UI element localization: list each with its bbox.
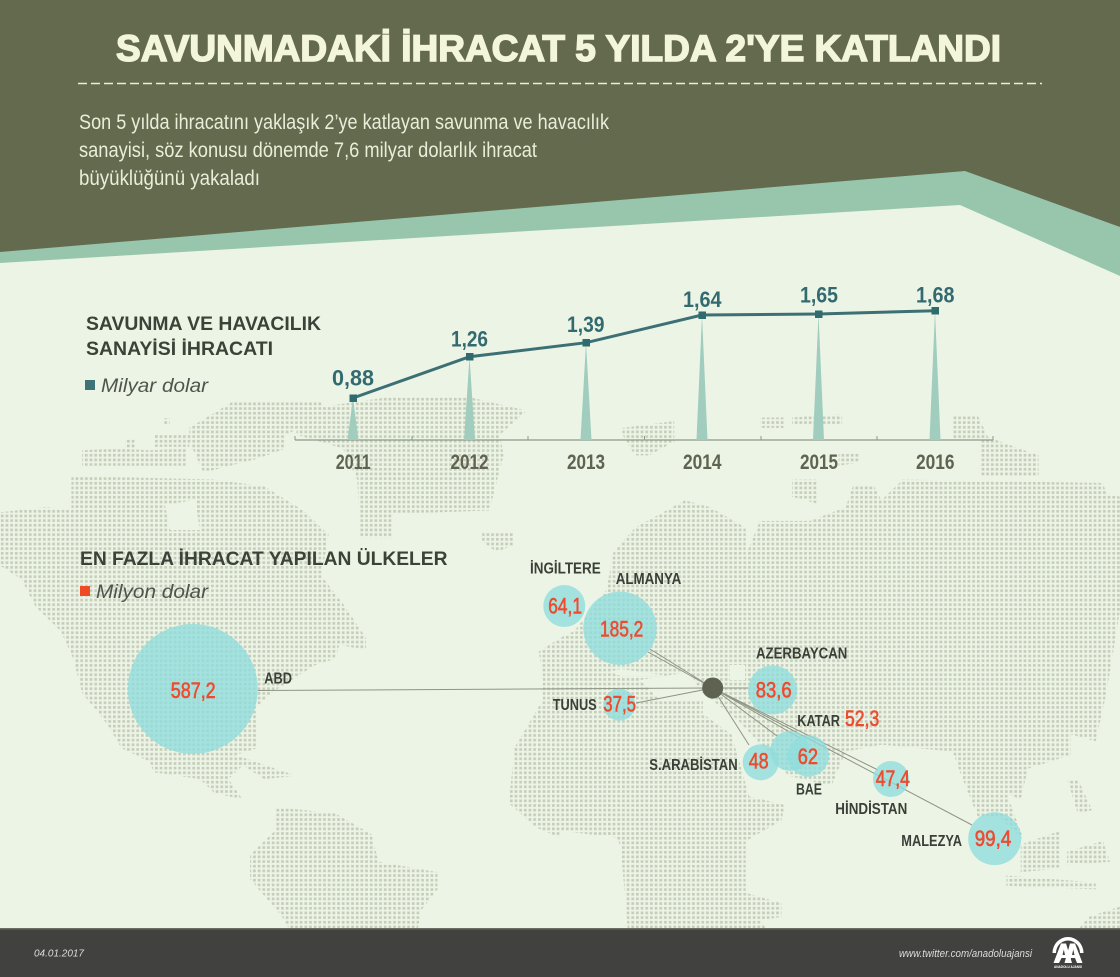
country values: 52,3 (845, 706, 879, 731)
country labels: ABD (264, 670, 292, 687)
year labels: 2016 (916, 451, 954, 474)
country labels: AZERBAYCAN (756, 646, 847, 663)
country values: 185,2 (600, 617, 643, 642)
origin point: Türkiye (702, 678, 723, 698)
connector lines (258, 649, 972, 825)
year labels (336, 451, 954, 474)
value labels: 1,64 (683, 287, 722, 312)
country values: 47,4 (876, 766, 910, 791)
legend: milyon dolar: Milyon dolar (96, 582, 209, 603)
line chart heading: SANAYİSİ İHRACATI (86, 339, 273, 360)
map section heading: EN FAZLA İHRACAT YAPILAN ÜLKELER (80, 549, 448, 570)
country values: 83,6 (756, 677, 792, 702)
country labels: KATAR (797, 713, 840, 730)
country values: 587,2 (171, 678, 216, 703)
country labels: İNGİLTERE (530, 559, 601, 577)
dotted world map (0, 390, 1120, 928)
legend: milyar dolar: Milyar dolar (101, 376, 209, 397)
year labels: 2013 (567, 451, 605, 474)
country values: 37,5 (603, 692, 636, 717)
value labels: 1,65 (800, 283, 838, 308)
value labels: 1,26 (451, 327, 488, 352)
intro text (79, 111, 609, 190)
bubbles (128, 585, 1021, 865)
year labels: 2015 (800, 451, 838, 474)
footer bar (0, 928, 1120, 977)
country labels: HİNDİSTAN (835, 800, 907, 818)
value labels (332, 283, 954, 391)
country values: 64,1 (548, 593, 582, 618)
intro text: büyüklüğünü yakaladı (79, 167, 260, 190)
icon: agency logo (1052, 937, 1084, 969)
year labels: 2014 (683, 451, 722, 474)
year labels: 2011 (336, 451, 371, 474)
source url: www.twitter.com/anadoluajansi (899, 948, 1032, 960)
header panel (0, 0, 1120, 252)
country labels: BAE (796, 781, 822, 798)
country values: 48 (749, 749, 769, 774)
value labels: 1,39 (567, 312, 604, 337)
trend line (353, 311, 935, 398)
icon: agency logo: ANADOLU AJANSI (1054, 965, 1082, 969)
country values: 99,4 (975, 826, 1011, 851)
country labels: S.ARABİSTAN (649, 756, 738, 774)
country labels: ALMANYA (616, 571, 682, 588)
intro text: Son 5 yılda ihracatını yaklaşık 2’ye katlayan savunma ve havacılık (79, 111, 609, 134)
year labels: 2012 (450, 451, 488, 474)
map water gaps (165, 500, 745, 700)
country values (171, 593, 1011, 851)
date: 04.01.2017 (34, 948, 85, 960)
header band: green accent (0, 160, 1120, 276)
line chart heading (86, 314, 321, 360)
line chart heading: SAVUNMA VE HAVACILIK (86, 314, 321, 335)
line chart: export by year (295, 283, 993, 474)
spikes (348, 311, 940, 440)
country values: 62 (798, 744, 818, 769)
markers (350, 307, 939, 402)
country labels: MALEZYA (901, 833, 962, 850)
country labels (264, 559, 962, 850)
value labels: 1,68 (916, 283, 954, 308)
value labels: 0,88 (332, 366, 374, 391)
country labels: TUNUS (553, 697, 597, 714)
intro text: sanayisi, söz konusu dönemde 7,6 milyar dolarlık ihracat (79, 139, 537, 162)
title: SAVUNMADAKİ İHRACAT 5 YILDA 2'YE KATLANDI (116, 28, 1001, 69)
